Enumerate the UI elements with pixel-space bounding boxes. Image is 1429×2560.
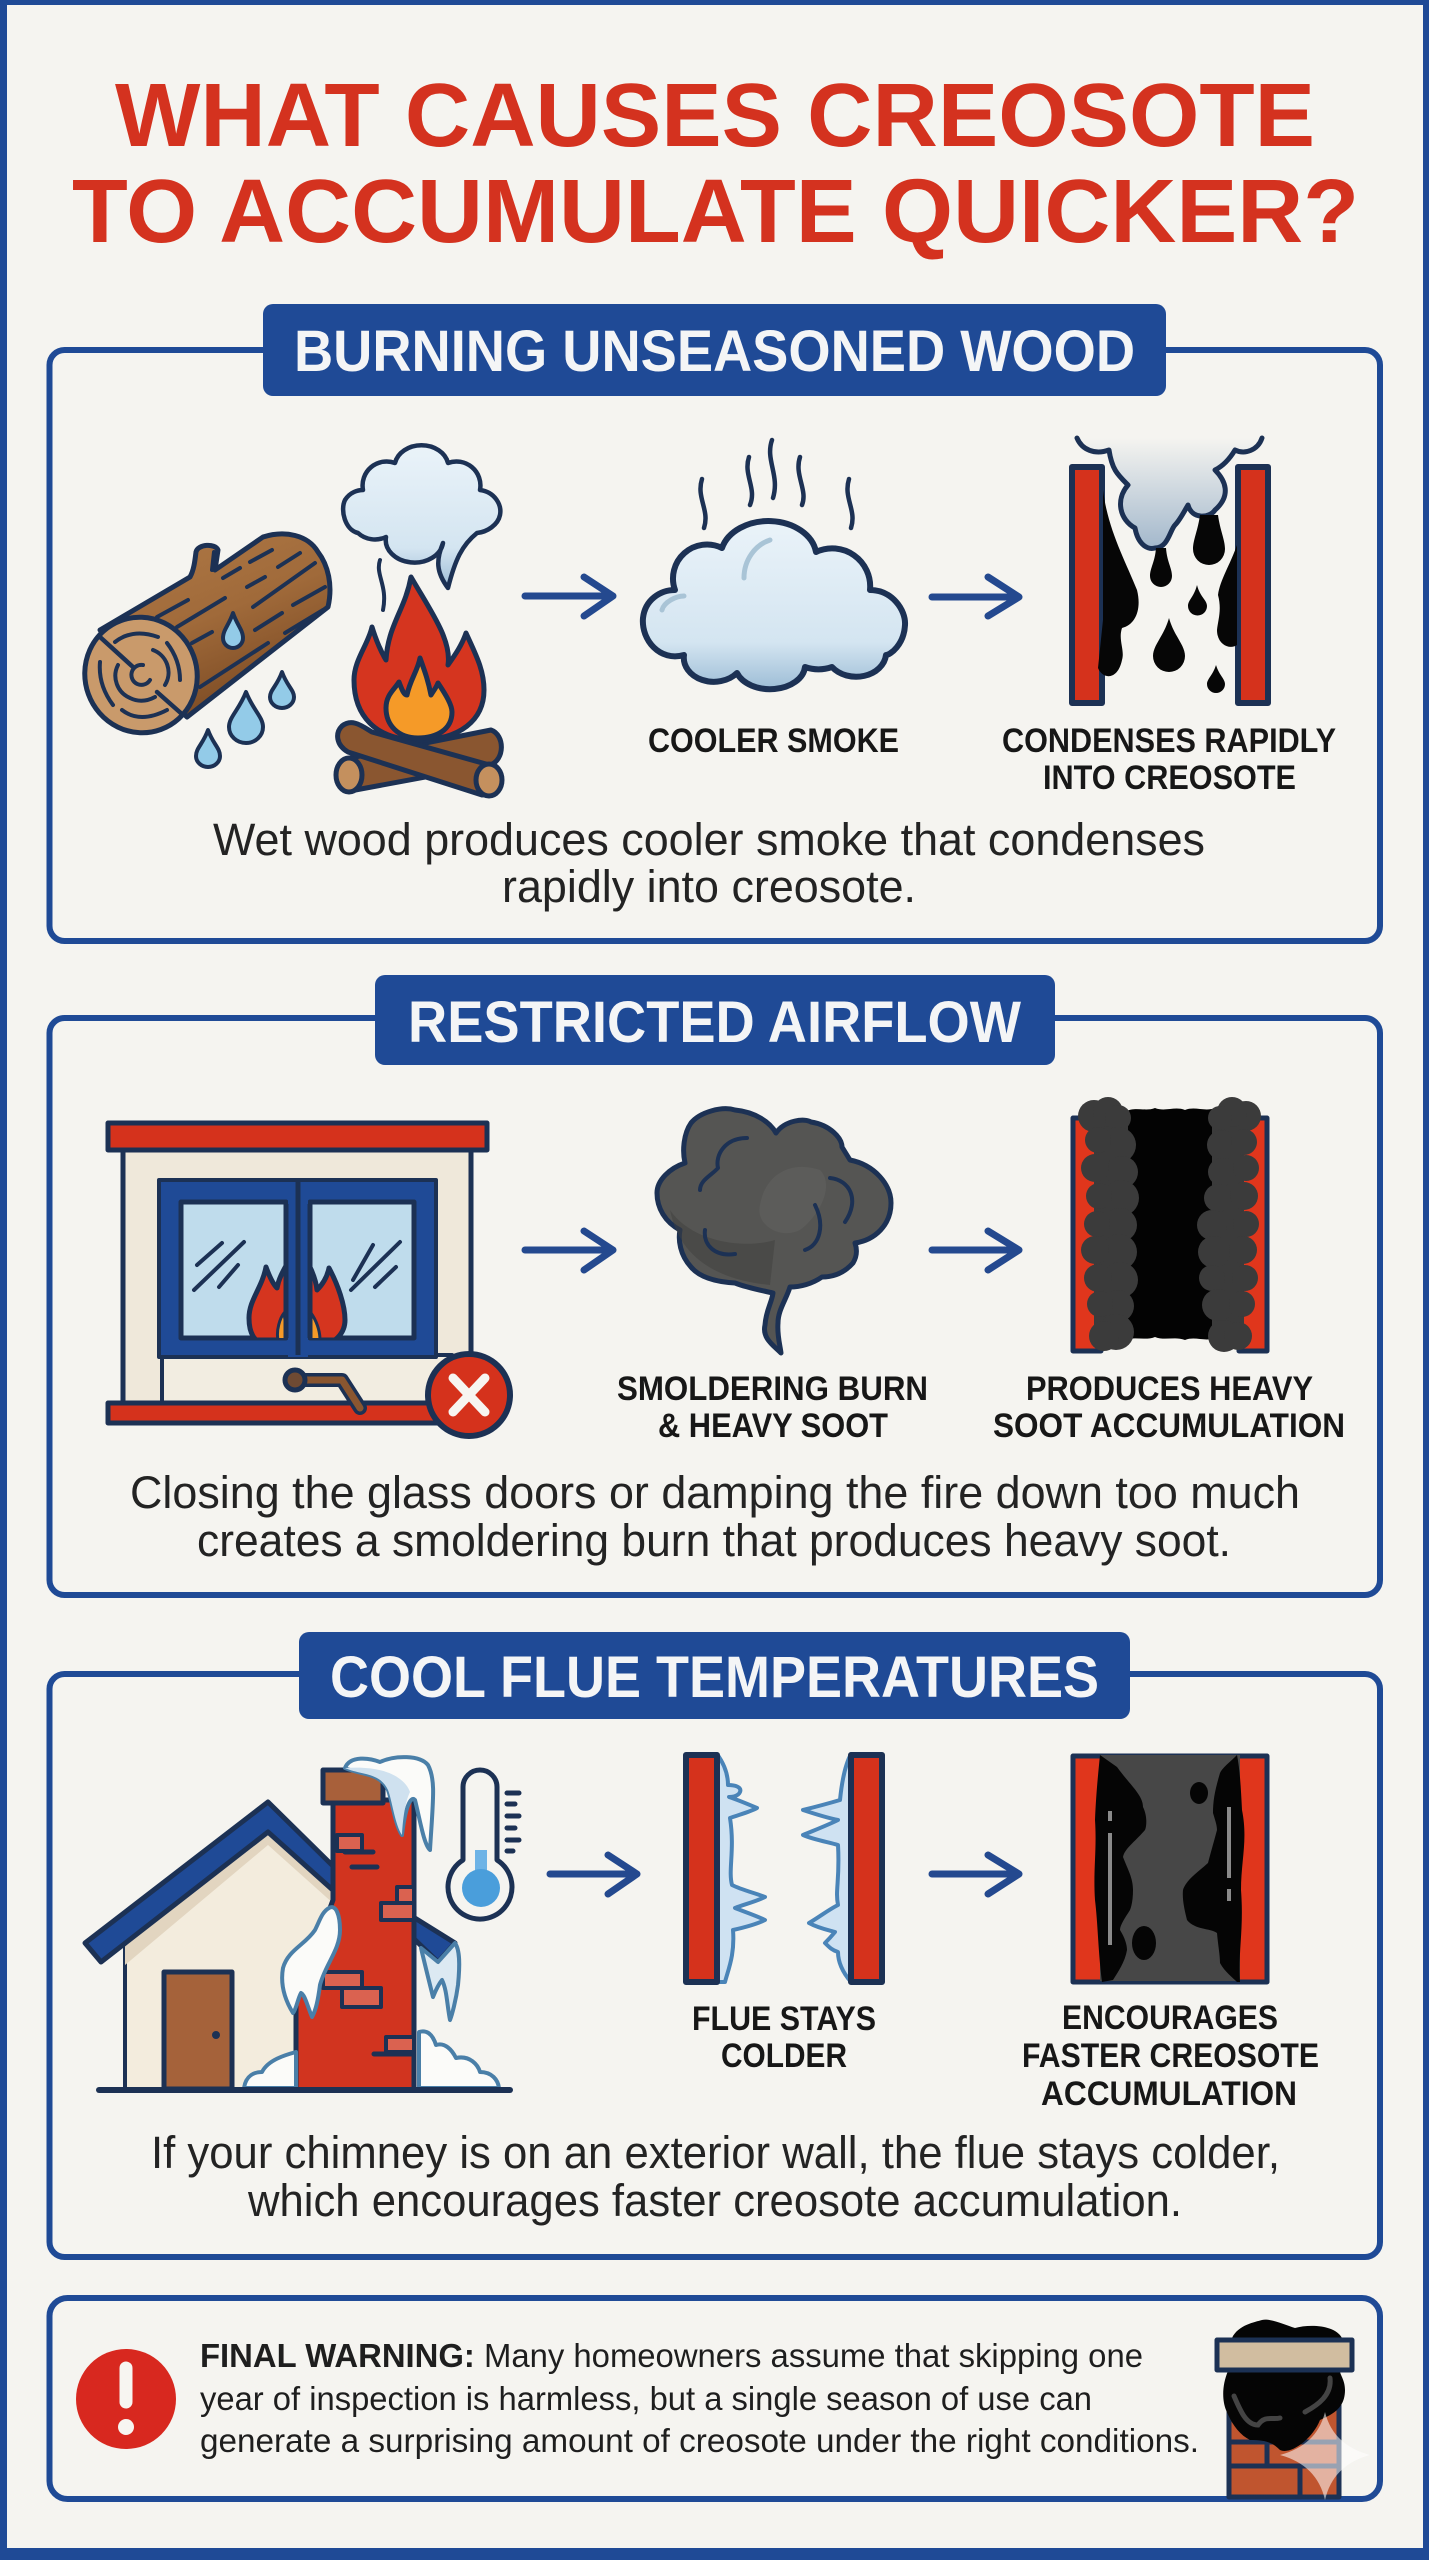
icon: fireplace with closed doors	[108, 1123, 510, 1436]
icon: exclamation mark	[76, 2349, 176, 2449]
panel: final warning	[50, 2298, 1380, 2500]
title: WHAT CAUSES CREOSOTE	[115, 66, 1315, 166]
description text: which encourages faster creosote accumulation.	[247, 2175, 1182, 2226]
icon: campfire with steam and cloud	[336, 445, 502, 796]
icon: cold flue with ice	[686, 1754, 882, 1982]
label: encourages faster creosote accumulation: ENCOURAGES	[1062, 1999, 1278, 2037]
icon: dark smoke cloud	[657, 1109, 891, 1353]
label: encourages faster creosote accumulation	[1022, 1999, 1319, 2113]
panel: cool flue temperatures	[50, 1632, 1380, 2257]
icon: flue with creosote drips	[1072, 438, 1268, 703]
description text: rapidly into creosote.	[502, 861, 916, 912]
description text	[130, 1467, 1300, 1566]
heading: cool flue temperatures: COOL FLUE TEMPERATURES	[330, 1645, 1099, 1710]
heading: restricted airflow: RESTRICTED AIRFLOW	[408, 990, 1021, 1055]
arrow	[525, 577, 613, 616]
arrow	[932, 577, 1019, 616]
icon: cooler smoke cloud	[643, 440, 905, 689]
label: condenses rapidly into creosote: CONDENSES RAPIDLY	[1002, 722, 1336, 760]
label: condenses rapidly into creosote: INTO CREOSOTE	[1043, 759, 1296, 797]
label: flue stays colder: COLDER	[721, 2037, 847, 2075]
label: smoldering burn and heavy soot: SMOLDERING BURN	[617, 1370, 928, 1408]
arrow	[932, 1855, 1019, 1894]
icon: soot filled flue	[1073, 1097, 1267, 1352]
label: smoldering burn and heavy soot	[617, 1370, 928, 1445]
heading: burning unseasoned wood: BURNING UNSEASONED WOOD	[294, 319, 1135, 384]
description text	[213, 814, 1205, 912]
title: TO ACCUMULATE QUICKER?	[72, 162, 1359, 262]
label: condenses rapidly into creosote	[1002, 722, 1336, 797]
panel: burning unseasoned wood	[50, 304, 1380, 941]
description text: creates a smoldering burn that produces heavy soot.	[197, 1515, 1231, 1566]
label: produces heavy soot accumulation: SOOT ACCUMULATION	[993, 1407, 1345, 1445]
warning text	[200, 2338, 1199, 2460]
arrow	[932, 1231, 1019, 1270]
label: produces heavy soot accumulation: PRODUCES HEAVY	[1026, 1370, 1313, 1408]
label: flue stays colder: FLUE STAYS	[692, 2000, 876, 2038]
label: flue stays colder	[692, 2000, 876, 2075]
icon: red x badge	[428, 1354, 510, 1436]
icon: wet log	[69, 534, 330, 767]
heading: restricted airflow	[375, 975, 1055, 1065]
description text: If your chimney is on an exterior wall, the flue stays colder,	[151, 2127, 1280, 2178]
description text: Closing the glass doors or damping the fire down too much	[130, 1467, 1300, 1518]
warning text: generate a surprising amount of creosote under the right conditions.	[200, 2423, 1199, 2460]
warning text: FINAL WARNING: Many homeowners assume that skipping one	[200, 2338, 1143, 2375]
label: produces heavy soot accumulation	[993, 1370, 1345, 1445]
arrow	[525, 1231, 613, 1270]
warning text: year of inspection is harmless, but a single season of use can	[200, 2381, 1092, 2418]
label: cooler smoke: COOLER SMOKE	[648, 722, 899, 760]
icon: flue coated with creosote	[1073, 1755, 1267, 1982]
description text	[151, 2127, 1280, 2226]
heading: burning unseasoned wood	[263, 304, 1166, 396]
label: encourages faster creosote accumulation: ACCUMULATION	[1041, 2075, 1297, 2113]
arrow	[550, 1855, 637, 1894]
description text: Wet wood produces cooler smoke that condenses	[213, 814, 1205, 865]
label: encourages faster creosote accumulation: FASTER CREOSOTE	[1022, 2037, 1319, 2075]
icon: soot covered chimney	[1217, 2320, 1370, 2500]
title	[72, 66, 1359, 262]
icon: thermometer	[448, 1770, 519, 1919]
panel: restricted airflow	[50, 975, 1380, 1595]
label: smoldering burn and heavy soot: & HEAVY SOOT	[658, 1407, 888, 1445]
icon: house with icy exterior chimney	[85, 1757, 510, 2090]
